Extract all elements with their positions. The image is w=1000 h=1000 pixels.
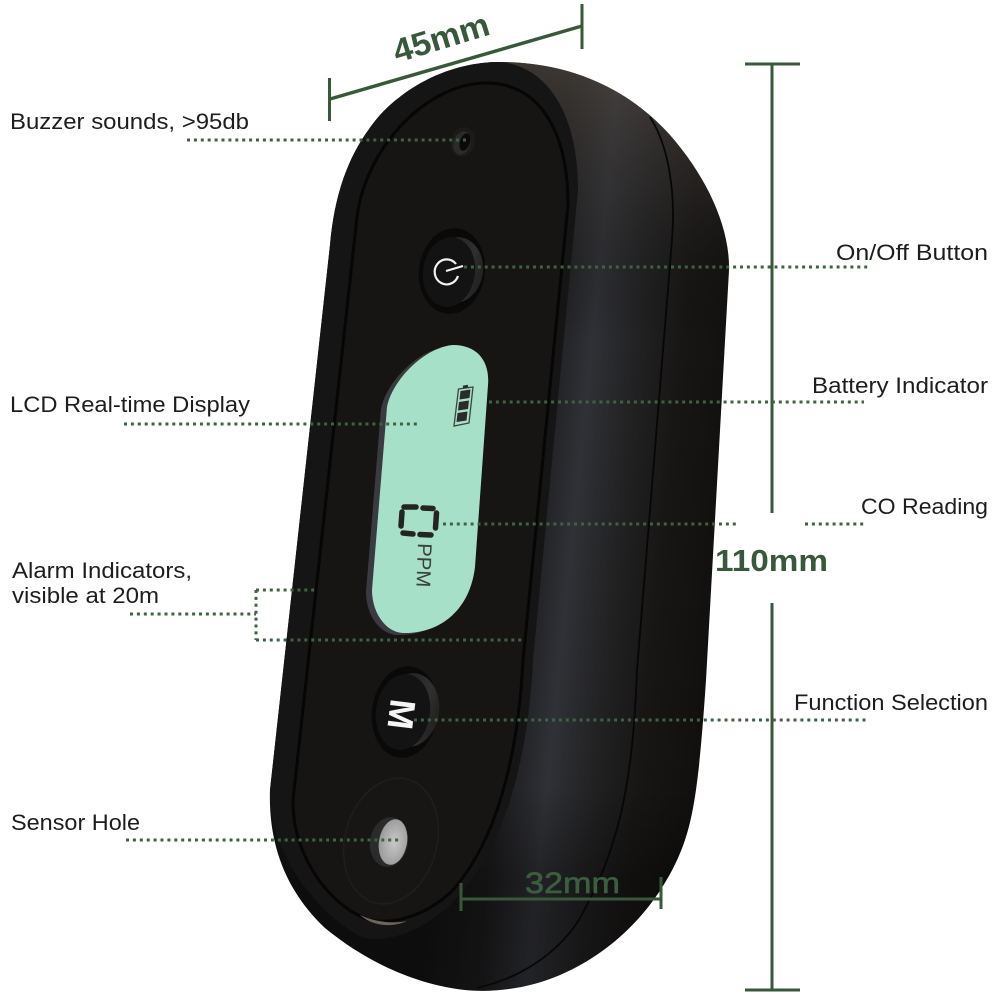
width dimension 45mm: 45mm: [388, 5, 494, 70]
callout: CO reading: CO Reading: [861, 494, 988, 519]
digit display: [401, 507, 436, 535]
callout: LCD display: LCD Real-time Display: [10, 392, 250, 417]
height dimension 110mm: 110mm: [715, 543, 828, 578]
device body: [270, 62, 729, 991]
callout: alarm indicators: [12, 558, 524, 640]
front panel: [293, 83, 568, 921]
width dimension 45mm: [330, 4, 582, 121]
panel reflection: [360, 915, 407, 925]
device shell: [270, 62, 729, 991]
shell seam: [477, 117, 673, 988]
function button: [366, 662, 444, 762]
callout: function selection: Function Selection: [794, 690, 988, 715]
callout: alarm indicators: Alarm Indicators,: [12, 558, 192, 583]
callout: buzzer: Buzzer sounds, >95db: [10, 109, 249, 134]
on/off button: [413, 224, 491, 318]
M icon: M: [379, 697, 424, 732]
buzzer hole: [448, 124, 478, 160]
lcd bezel: [366, 347, 482, 635]
callout: battery indicator: Battery Indicator: [812, 373, 988, 398]
sensor hole: [330, 767, 452, 915]
callout: alarm indicators: visible at 20m: [12, 583, 159, 608]
callout: sensor hole: Sensor Hole: [11, 810, 140, 835]
front bezel: [270, 62, 578, 939]
ppm label: PPM: [411, 543, 435, 588]
power icon: [435, 259, 458, 284]
callout: on/off button: On/Off Button: [836, 240, 988, 265]
battery icon: [454, 386, 473, 426]
depth dimension 32mm: 32mm: [525, 867, 620, 900]
lcd screen: [372, 345, 488, 633]
